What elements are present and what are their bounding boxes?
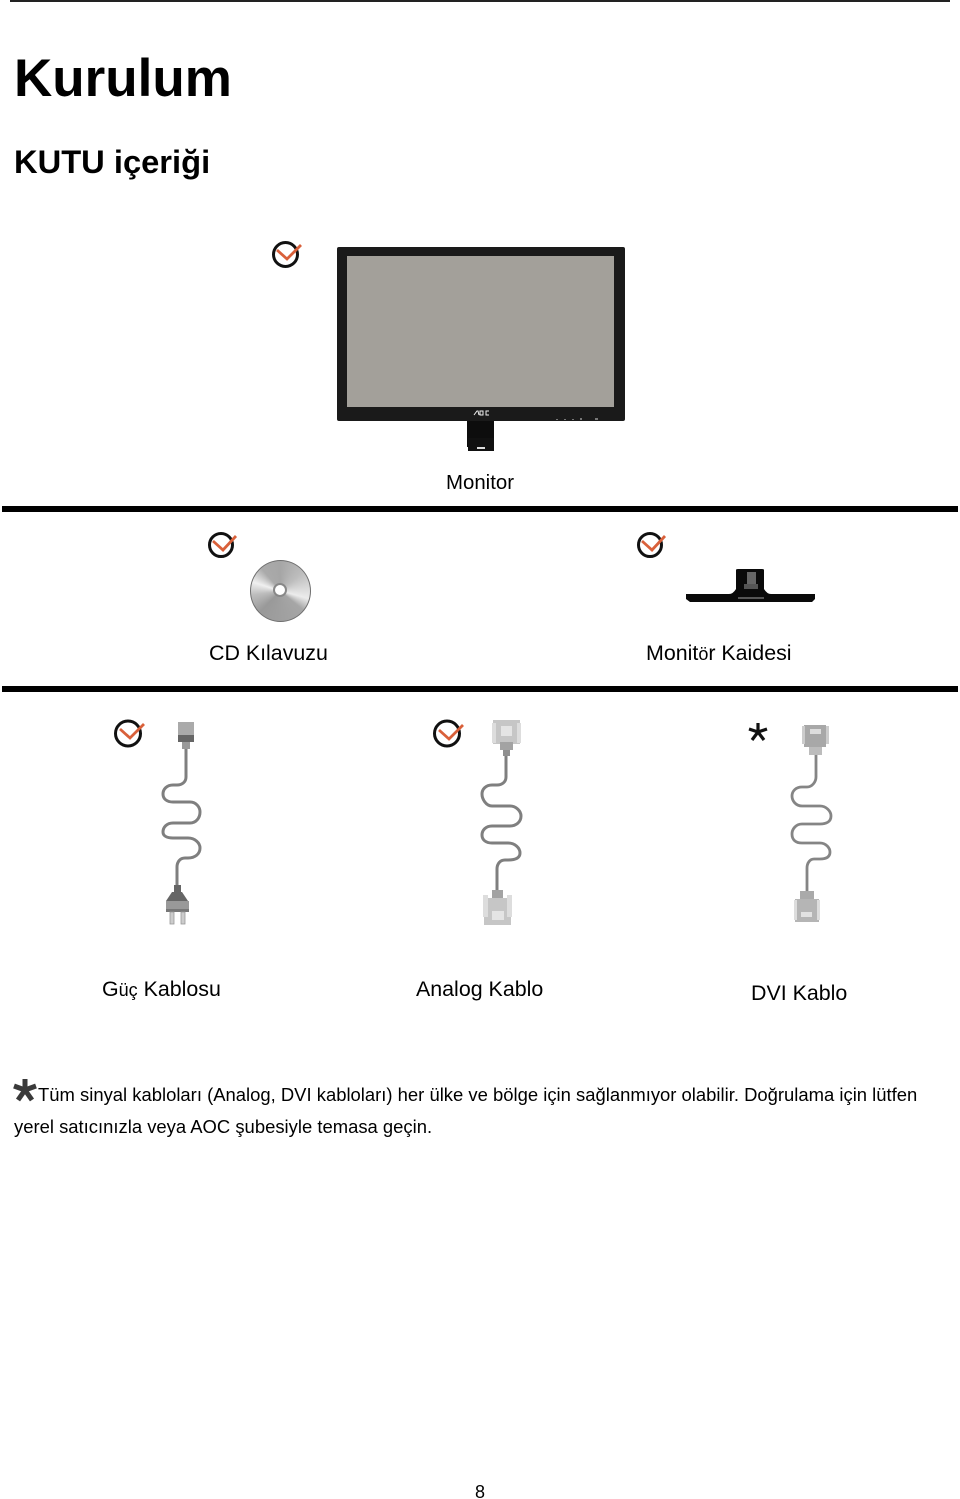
label: DVI cable: DVI Kablo <box>751 981 847 1005</box>
icon: monitor base <box>686 569 815 602</box>
icon: power cable <box>163 722 200 924</box>
icon: analog cable <box>482 720 521 925</box>
label: analog cable: Analog Kablo <box>416 977 543 1001</box>
label: CD: CD Kılavuzu <box>209 641 328 665</box>
icon: check power <box>116 721 144 746</box>
subheading: KUTU içeriği <box>14 143 210 180</box>
footnote line 2: yerel satıcınızla veya AOC şubesiyle temasa geçin. <box>14 1116 432 1137</box>
icon: DVI cable <box>792 725 831 922</box>
label: base: Monitör Kaidesi <box>646 641 792 665</box>
icon: footnote asterisk <box>14 1079 36 1100</box>
label: power cable: Güç Kablosu <box>102 977 221 1001</box>
footnote line 1: Tüm sinyal kabloları (Analog, DVI kabloları) her ülke ve bölge için sağlanmıyor olabilir. Doğrulama için lütfen <box>38 1084 917 1105</box>
icon: check base <box>638 534 665 556</box>
title: Kurulum <box>14 49 232 108</box>
icon: check analog <box>434 721 463 746</box>
icon: asterisk <box>749 723 767 740</box>
icon: check CD <box>210 534 236 556</box>
icon: check monitor <box>274 242 301 266</box>
icon: compact disc <box>250 560 311 622</box>
label: Monitor: Monitor <box>446 472 514 494</box>
icon: monitor <box>337 247 625 451</box>
